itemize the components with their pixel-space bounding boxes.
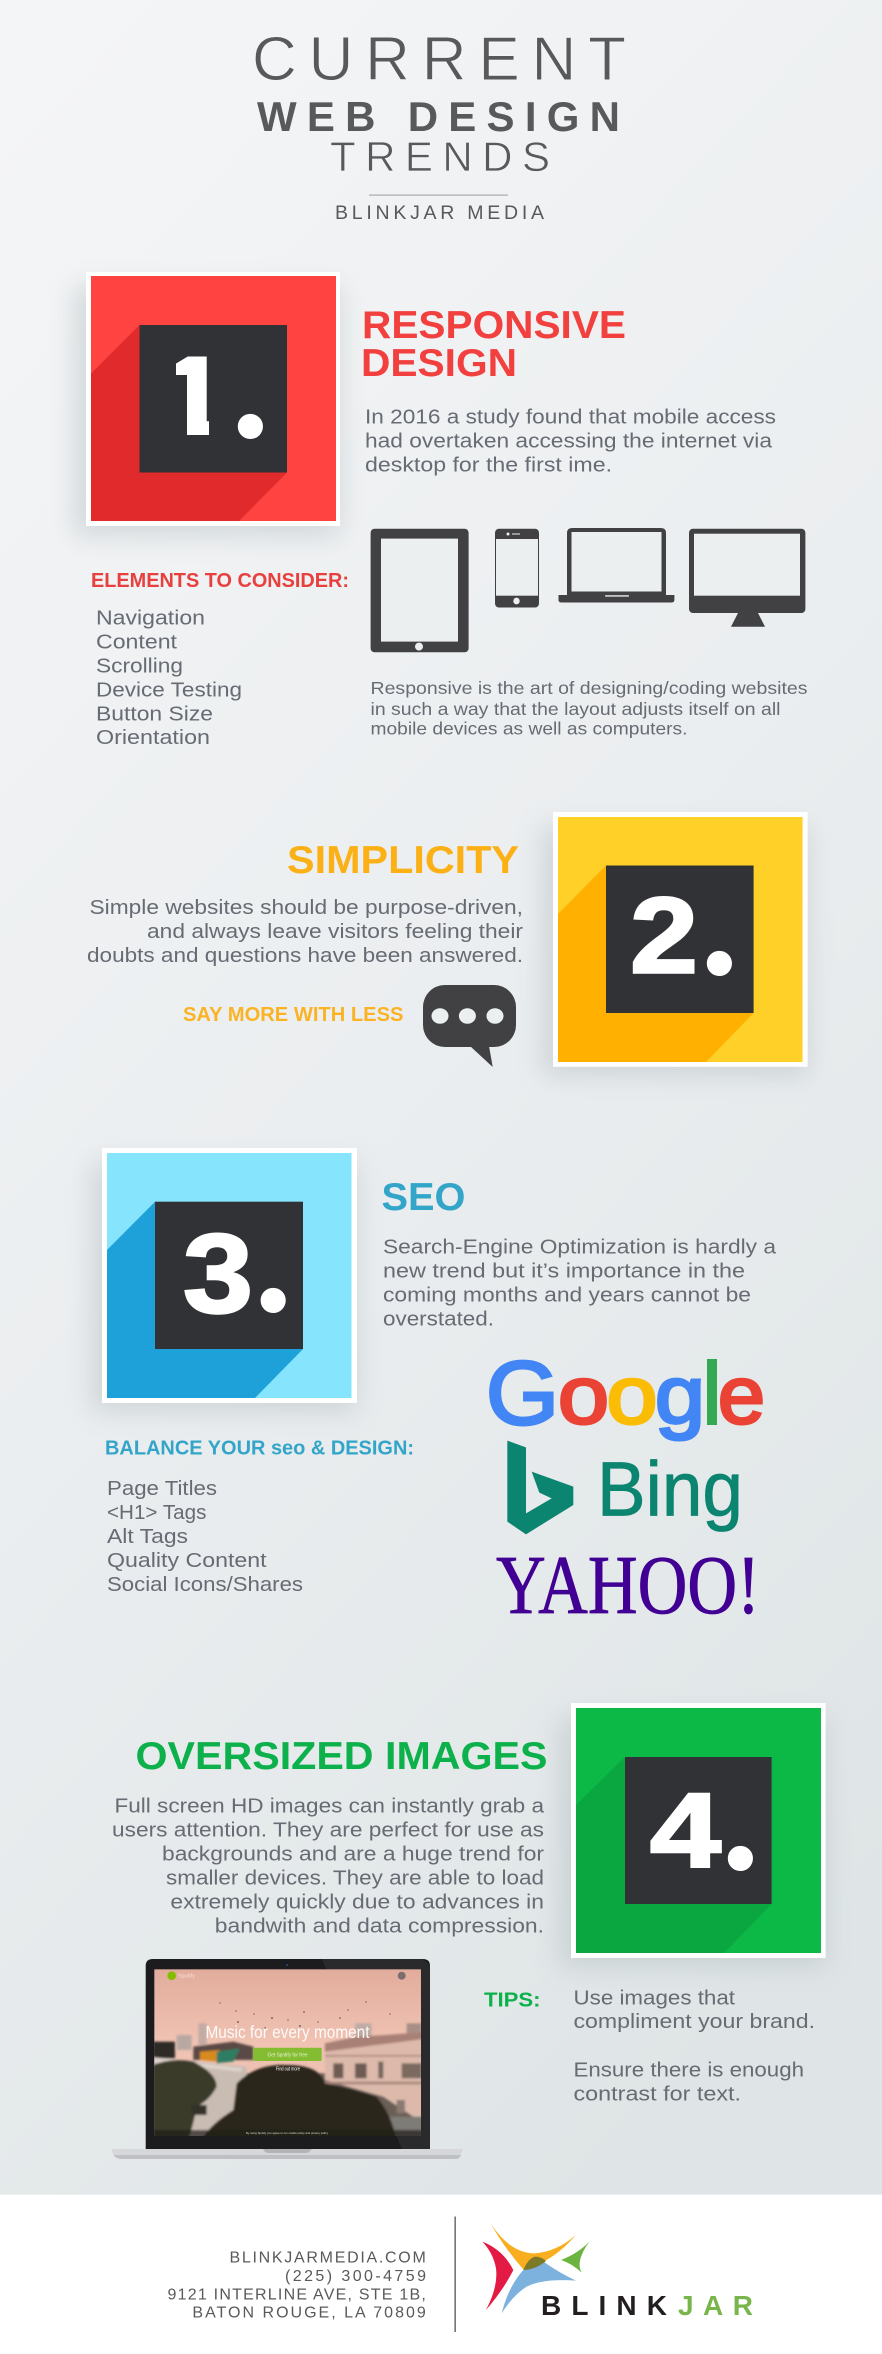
say more with less: SAY MORE WITH LESS bbox=[183, 1004, 404, 1026]
description: new trend but it’s importance in the bbox=[383, 1261, 745, 1283]
description: smaller devices. They are able to load bbox=[166, 1868, 544, 1890]
description bbox=[383, 1236, 777, 1331]
list: elements: Orientation bbox=[96, 727, 210, 749]
logo: bing bbox=[507, 1441, 743, 1534]
list: seo items: Social Icons/Shares bbox=[107, 1574, 303, 1596]
list: elements: Content bbox=[96, 632, 177, 654]
icon: desktop monitor bbox=[689, 529, 805, 627]
list: elements: Scrolling bbox=[96, 655, 183, 677]
description: extremely quickly due to advances in bbox=[170, 1892, 544, 1914]
number card 2 bbox=[542, 812, 808, 1076]
intro text: desktop for the first ime. bbox=[365, 455, 612, 477]
number card 4: 4 bbox=[650, 1772, 721, 1890]
logo: google: G bbox=[486, 1344, 559, 1444]
description: bandwith and data compression. bbox=[215, 1915, 544, 1937]
logo: google bbox=[486, 1344, 765, 1444]
laptop with website screenshot: Music for every moment bbox=[206, 2022, 370, 2042]
panel: oversized images bbox=[112, 1703, 826, 2159]
description: and always leave visitors feeling their bbox=[147, 921, 523, 943]
tips text: Ensure there is enough bbox=[574, 2059, 804, 2081]
title bbox=[252, 25, 626, 224]
description: backgrounds and are a huge trend for bbox=[162, 1844, 544, 1866]
laptop with website screenshot: By using Spotify you agree to our cookie policy and privacy policy bbox=[246, 2131, 329, 2135]
list: elements: Device Testing bbox=[96, 679, 242, 701]
number card 1 bbox=[74, 272, 340, 536]
list: seo items: Page Titles bbox=[107, 1478, 217, 1500]
intro text bbox=[365, 406, 776, 477]
list: seo items: Alt Tags bbox=[107, 1526, 188, 1548]
title: TRENDS bbox=[330, 133, 550, 180]
logo: google: o bbox=[558, 1350, 609, 1441]
logo: blinkjar: JAR bbox=[678, 2290, 753, 2321]
number card 2: . bbox=[700, 836, 739, 1008]
heading: RESPONSIVE bbox=[362, 304, 626, 347]
panel: simplicity bbox=[87, 812, 808, 1076]
description bbox=[112, 1795, 545, 1937]
description: Full screen HD images can instantly grab a bbox=[114, 1795, 545, 1817]
list: seo items: Quality Content bbox=[107, 1550, 267, 1572]
title: CURRENT bbox=[252, 25, 626, 94]
logo: google: o bbox=[606, 1350, 658, 1441]
title: BLINKJAR MEDIA bbox=[335, 202, 544, 224]
tips label: TIPS: bbox=[484, 1990, 540, 2012]
heading: SIMPLICITY bbox=[287, 839, 519, 882]
list: elements: Navigation bbox=[96, 607, 205, 629]
responsive description: Responsive is the art of designing/coding websites bbox=[370, 678, 808, 698]
logo: blinkjar bbox=[482, 2223, 753, 2321]
laptop with website screenshot: Spotify bbox=[178, 1974, 195, 1980]
panel: seo bbox=[91, 1148, 777, 1632]
heading: OVERSIZED IMAGES bbox=[136, 1735, 548, 1778]
logo: bing: Bing bbox=[597, 1447, 743, 1533]
list: elements bbox=[96, 607, 242, 749]
number card 4: . bbox=[721, 1731, 760, 1903]
laptop with website screenshot: Get Spotify for free bbox=[268, 2052, 308, 2058]
description bbox=[87, 897, 523, 967]
heading bbox=[361, 304, 626, 385]
tips text bbox=[574, 1988, 815, 2106]
contact details: BLINKJARMEDIA.COM bbox=[230, 2250, 426, 2266]
number card 3: . bbox=[254, 1173, 293, 1345]
elements to consider heading: ELEMENTS TO CONSIDER: bbox=[91, 570, 349, 592]
list: seo items: <H1> Tags bbox=[107, 1502, 206, 1524]
number card 3 bbox=[91, 1148, 357, 1412]
tips text: compliment your brand. bbox=[574, 2011, 815, 2033]
panel: responsive design bbox=[74, 272, 808, 749]
contact details: BATON ROUGE, LA 70809 bbox=[192, 2305, 426, 2322]
laptop with website screenshot: Find out more bbox=[276, 2066, 300, 2072]
description: overstated. bbox=[383, 1309, 494, 1331]
contact details: (225) 300-4759 bbox=[285, 2268, 426, 2285]
tips text: Use images that bbox=[574, 1988, 735, 2010]
responsive description: mobile devices as well as computers. bbox=[370, 719, 688, 739]
list: seo items bbox=[107, 1478, 303, 1596]
description: Search-Engine Optimization is hardly a bbox=[383, 1236, 777, 1258]
responsive description: in such a way that the layout adjusts itself on all bbox=[370, 699, 780, 719]
title: WEB DESIGN bbox=[257, 93, 620, 140]
heading: DESIGN bbox=[361, 342, 517, 385]
logo: google: e bbox=[718, 1350, 765, 1441]
logo: yahoo: YAHOO! bbox=[496, 1539, 760, 1632]
description: doubts and questions have been answered. bbox=[87, 945, 523, 967]
list: elements: Button Size bbox=[96, 703, 213, 725]
laptop with website screenshot bbox=[112, 1959, 463, 2159]
description: users attention. They are perfect for use as bbox=[112, 1820, 544, 1842]
contact details bbox=[168, 2250, 426, 2322]
description: coming months and years cannot be bbox=[383, 1285, 751, 1307]
intro text: In 2016 a study found that mobile access bbox=[365, 406, 776, 428]
icon: phone bbox=[495, 529, 539, 608]
number card 1: 1 bbox=[160, 336, 226, 459]
logo: google: g bbox=[655, 1350, 705, 1441]
number card 1: . bbox=[231, 299, 270, 471]
intro text: had overtaken accessing the internet via bbox=[365, 431, 773, 453]
icon: speech bubble bbox=[423, 985, 516, 1067]
footer bbox=[0, 2195, 882, 2354]
logo: blinkjar: BLINK bbox=[541, 2290, 667, 2321]
number card 4 bbox=[560, 1703, 826, 1967]
balance heading: BALANCE YOUR seo & DESIGN: bbox=[105, 1437, 414, 1459]
responsive description bbox=[370, 678, 808, 739]
description: Simple websites should be purpose-driven, bbox=[90, 897, 523, 919]
contact details: 9121 INTERLINE AVE, STE 1B, bbox=[168, 2286, 426, 2304]
tips text: contrast for text. bbox=[574, 2084, 741, 2106]
icon: tablet bbox=[371, 529, 469, 652]
icon: laptop bbox=[558, 528, 674, 602]
number card 2: 2 bbox=[630, 874, 698, 996]
number card 3: 3 bbox=[183, 1211, 253, 1336]
heading: SEO bbox=[382, 1176, 466, 1219]
